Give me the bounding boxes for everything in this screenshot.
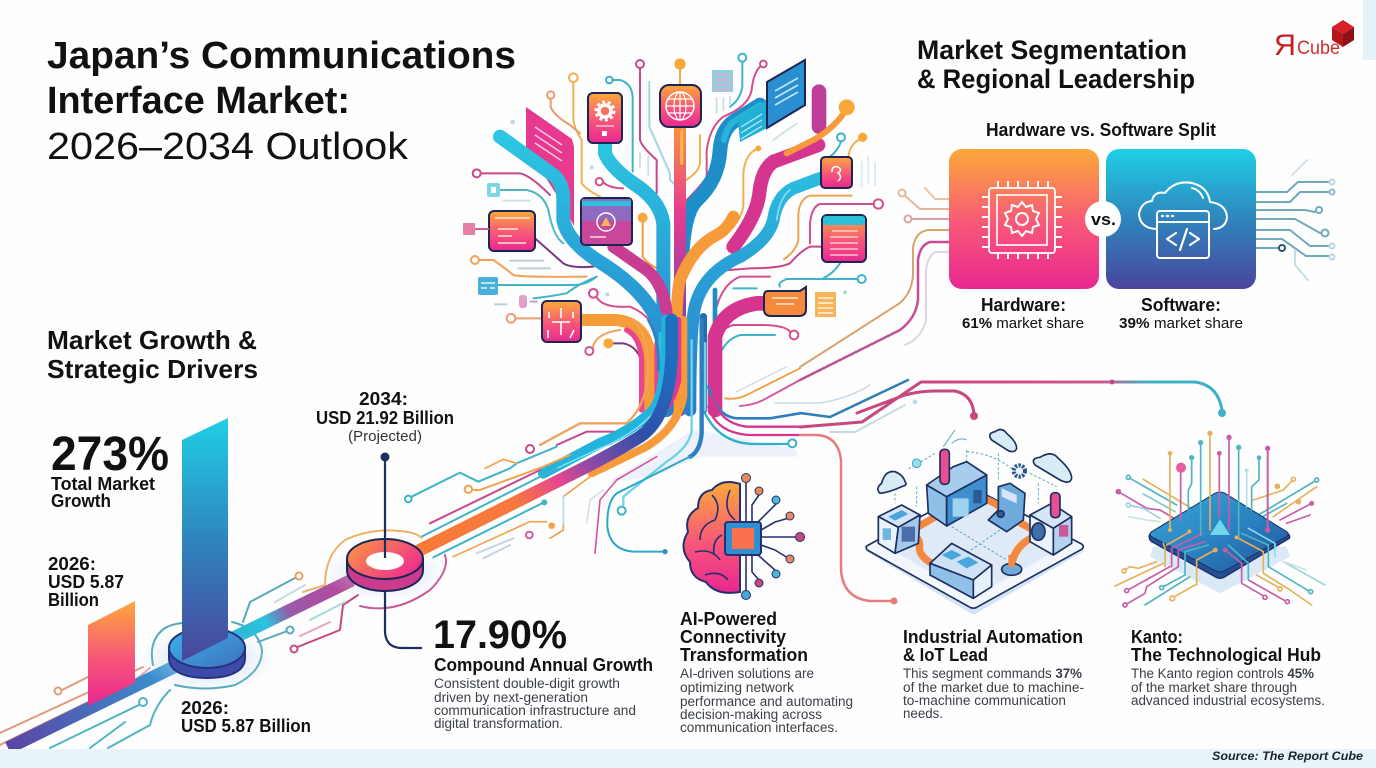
trunk base and bundle toward timeline xyxy=(405,320,800,558)
heading: market growth: Market Growth & xyxy=(47,325,257,355)
icon: left code panel xyxy=(489,211,535,251)
icon: small pink square xyxy=(463,223,489,235)
stat: CAGR: digital transformation. xyxy=(434,716,563,731)
text: industrial automation: This segment commands 37% xyxy=(903,666,1082,681)
badge: vs xyxy=(1085,201,1121,237)
bar: 2034 value xyxy=(182,418,228,661)
text: AI connectivity: optimizing network xyxy=(680,680,794,695)
bar: 2026 value xyxy=(88,601,135,706)
text: industrial automation xyxy=(903,627,1084,721)
text: Kanto hub xyxy=(1131,627,1325,708)
stat: CAGR: driven by next-generation xyxy=(434,690,588,705)
icon: central media panel xyxy=(581,198,632,245)
text: Kanto hub: The Kanto region controls 45% xyxy=(1131,666,1314,681)
disc: 2026 node xyxy=(137,628,277,692)
stat: 273%: 273% xyxy=(51,428,169,481)
left block xyxy=(878,505,920,527)
card: software xyxy=(1106,149,1256,289)
card: hardware xyxy=(949,149,1099,289)
text: industrial automation: of the market due to machine- xyxy=(903,680,1084,695)
text: industrial automation: Industrial Automation xyxy=(903,627,1083,647)
footer bar: Source: The Report Cube xyxy=(1212,749,1363,763)
timeline band xyxy=(8,580,352,748)
outer upper wires xyxy=(1128,477,1177,505)
text: AI connectivity: decision-making across xyxy=(680,707,822,722)
label: software share: Software: xyxy=(1141,295,1221,315)
icon: small list xyxy=(712,70,733,92)
heading: market segmentation xyxy=(917,35,1195,94)
text: industrial automation: & IoT Lead xyxy=(903,645,988,665)
icon: cloud window xyxy=(1139,182,1227,258)
vertical wires xyxy=(1167,453,1172,530)
text: AI connectivity: performance and automating xyxy=(680,694,853,709)
badge: vs: vs. xyxy=(1091,210,1116,229)
icon: phone gear xyxy=(588,93,622,143)
right block xyxy=(1030,503,1072,528)
icon: small blue card xyxy=(478,277,498,295)
connector wires to lower panels xyxy=(775,380,1226,604)
label: 2026 bottom: 2026: xyxy=(181,698,229,718)
trunk shadow wash xyxy=(607,430,797,483)
label: 2026 left: USD 5.87 xyxy=(48,572,124,592)
heading: market growth xyxy=(47,325,258,384)
logo xyxy=(1274,20,1354,62)
text: Kanto hub: The Technological Hub xyxy=(1131,645,1321,665)
icon: right window xyxy=(822,215,866,262)
label: 2034: USD 21.92 Billion xyxy=(316,408,454,428)
outer lower wires xyxy=(1123,562,1157,571)
icon: chat bubble xyxy=(764,287,806,316)
icon: pink document xyxy=(526,107,574,226)
circuit lines around timeline xyxy=(0,530,446,748)
callout pin: 2034 xyxy=(380,452,390,558)
title: 2026–2034 Outlook xyxy=(47,126,409,168)
footer bar xyxy=(0,749,1376,768)
wires on chip xyxy=(1163,532,1190,567)
label: hardware share xyxy=(962,295,1084,332)
disc: 2034 node xyxy=(323,539,447,602)
clouds xyxy=(878,471,906,493)
thick branches xyxy=(500,92,855,410)
bottom block xyxy=(930,543,992,580)
label: 2034: 2034: xyxy=(359,389,408,409)
icon: right tile xyxy=(821,157,852,188)
icon: lower left key tile xyxy=(542,301,581,342)
label: 2026 bottom: USD 5.87 Billion xyxy=(181,716,311,736)
tree illustration xyxy=(463,54,883,410)
logo: Я xyxy=(1274,29,1296,62)
icon: globe xyxy=(660,85,701,127)
heading: market segmentation: Market Segmentation xyxy=(917,35,1187,65)
text: Kanto hub: advanced industrial ecosystems. xyxy=(1131,693,1325,708)
node xyxy=(912,459,921,468)
icon: factory isometric xyxy=(865,430,1085,615)
text: Kanto hub: Kanto: xyxy=(1131,627,1183,647)
label: 2026 left xyxy=(48,554,124,610)
stat: CAGR xyxy=(433,613,653,731)
label: 2034 xyxy=(316,389,454,445)
icon: blue document xyxy=(738,60,805,142)
icon: small orange list xyxy=(815,292,836,317)
subheading: hardware vs software: Hardware vs. Software Split xyxy=(986,120,1216,140)
title: Japan’s Communications xyxy=(47,35,516,77)
label: 2026 left: Billion xyxy=(48,590,99,610)
label: 2026 bottom xyxy=(181,698,311,736)
label: hardware share: Hardware: xyxy=(981,295,1066,315)
stat: 273% xyxy=(51,428,169,511)
text: AI connectivity: AI-driven solutions are xyxy=(680,666,814,681)
header strip accent xyxy=(1363,0,1376,60)
text: AI connectivity: AI-Powered xyxy=(680,609,777,629)
gear xyxy=(1014,465,1025,477)
icon: small cyan square xyxy=(487,183,500,197)
platform xyxy=(865,492,1085,615)
text: AI connectivity xyxy=(680,609,853,735)
mid machine xyxy=(988,483,1025,532)
stat: 273%: Growth xyxy=(51,491,111,511)
label: 2026 left: 2026: xyxy=(48,554,96,574)
icon: processor with gear xyxy=(982,181,1062,259)
pipes xyxy=(908,497,1042,567)
heading: market segmentation: & Regional Leadership xyxy=(917,64,1195,94)
text: Kanto hub: of the market share through xyxy=(1131,680,1297,695)
title xyxy=(47,35,516,168)
chimney xyxy=(940,449,949,484)
text: industrial automation: needs. xyxy=(903,706,943,721)
icon: small capsule xyxy=(519,295,527,308)
stat: 273%: Total Market xyxy=(51,474,155,494)
pipe base xyxy=(1002,563,1022,575)
stat: CAGR: 17.90% xyxy=(433,613,567,657)
callout line: CAGR xyxy=(385,591,422,648)
chip body xyxy=(1149,493,1290,578)
text: industrial automation: to-machine communication xyxy=(903,693,1066,708)
label: software share xyxy=(1119,295,1243,332)
text: AI connectivity: Connectivity xyxy=(680,627,786,647)
center factory xyxy=(927,485,947,526)
logo: Cube xyxy=(1297,38,1340,59)
stat: CAGR: communication infrastructure and xyxy=(434,703,636,718)
right circuit wires xyxy=(800,160,1334,380)
text: AI connectivity: Transformation xyxy=(680,645,808,665)
heading: market growth: Strategic Drivers xyxy=(47,354,258,384)
icon: AI brain xyxy=(683,474,804,600)
label: software share: 39% market share xyxy=(1119,315,1243,332)
title: Interface Market: xyxy=(47,80,350,122)
text: AI connectivity: communication interfaces. xyxy=(680,720,838,735)
icon: Kanto chip hub xyxy=(1115,431,1325,607)
shadow xyxy=(1150,547,1290,593)
thin branch circuits xyxy=(471,54,883,383)
label: hardware share: 61% market share xyxy=(962,315,1084,332)
label: 2034: (Projected) xyxy=(348,428,422,445)
stat: CAGR: Compound Annual Growth xyxy=(434,655,653,675)
stat: CAGR: Consistent double-digit growth xyxy=(434,676,620,691)
